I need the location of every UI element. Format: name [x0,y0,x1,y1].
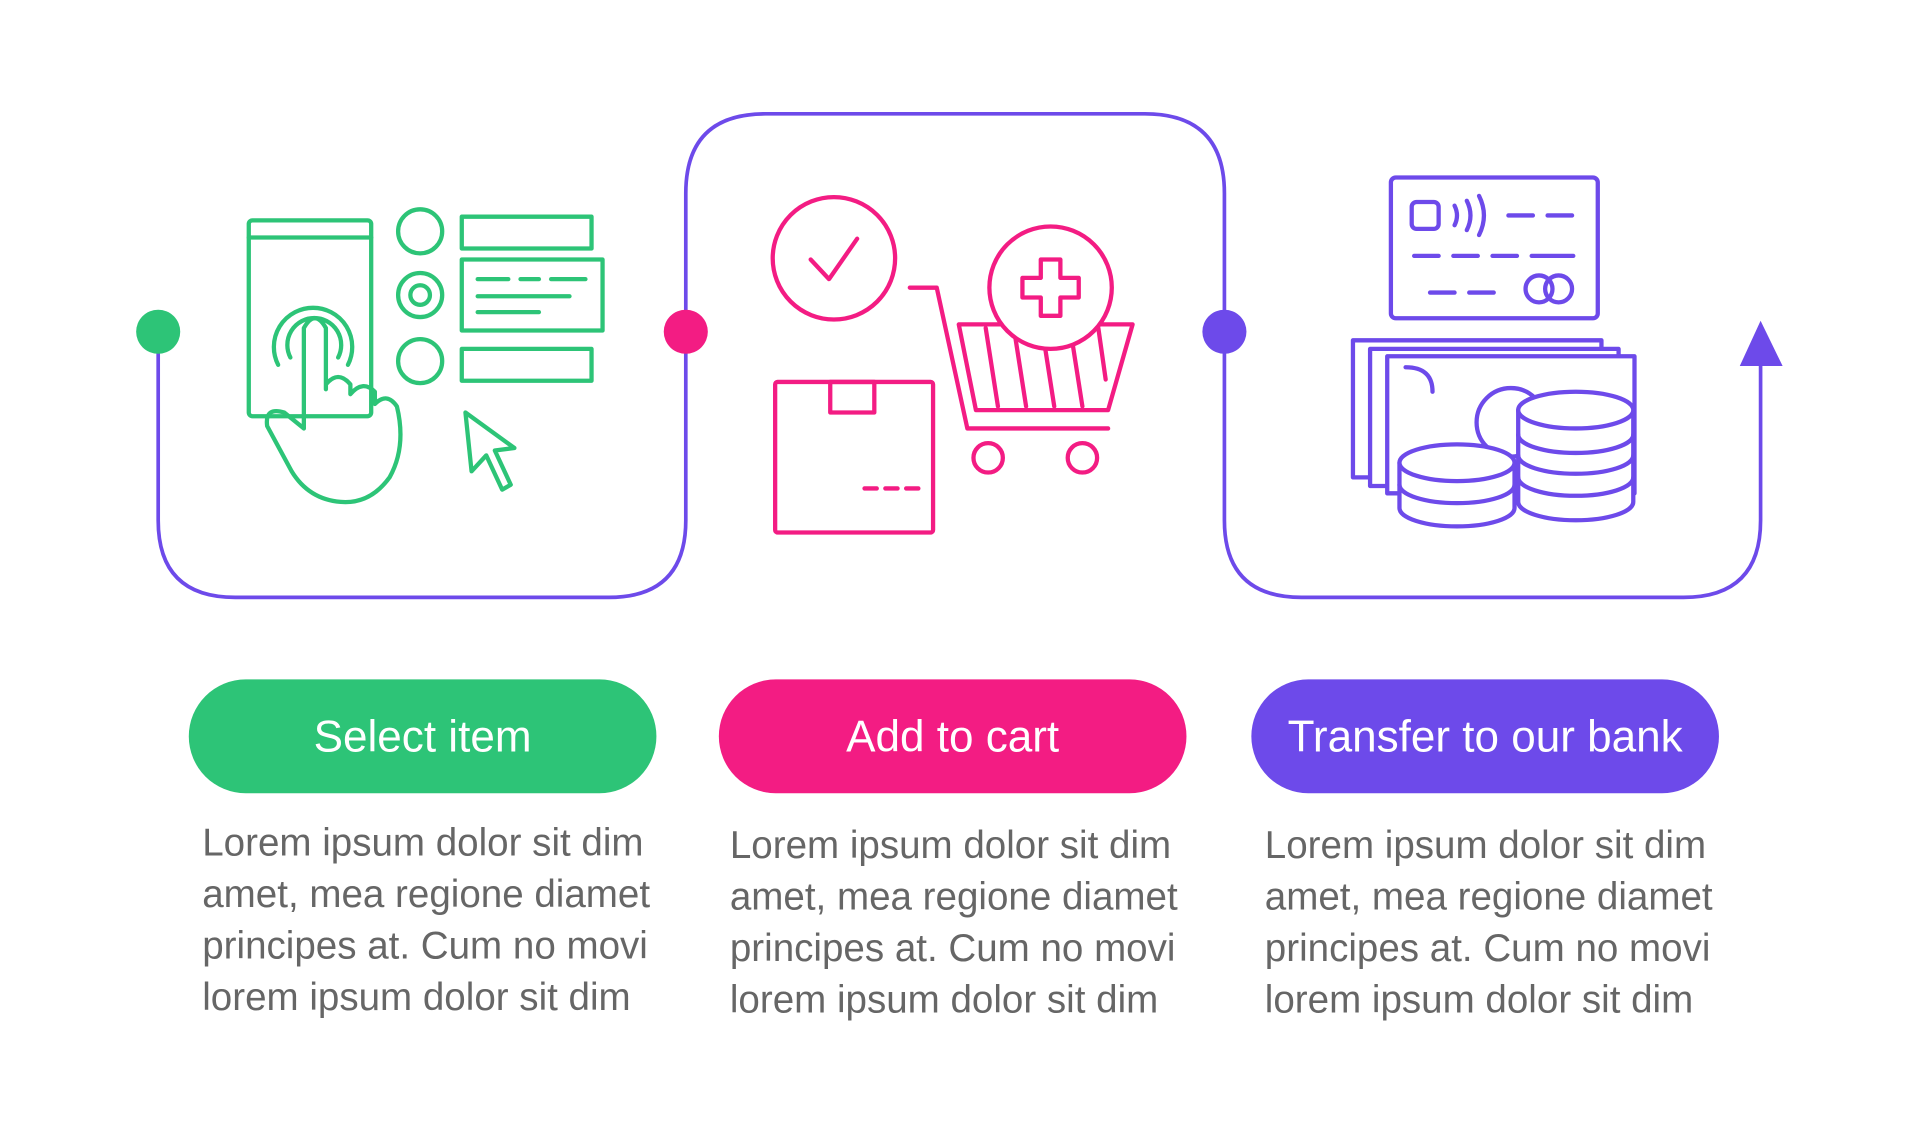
pill: Transfer to our bank: Transfer to our bank [1288,713,1684,762]
text block 1: principes at. Cum no movi [202,925,648,968]
text block 2: amet, mea regione diamet [730,876,1178,919]
flow line [158,114,1761,597]
text block 2 [730,824,1178,1021]
pill: Select item: Select item [314,713,532,762]
text block 1: Lorem ipsum dolor sit dim [202,822,644,865]
icon: bank transfer [1353,178,1634,526]
icon: select item [249,209,603,502]
text block 3 [1265,824,1713,1021]
dot: step 1 [136,310,180,354]
text block 3: principes at. Cum no movi [1265,927,1710,970]
icon: add to cart [773,197,1133,532]
pill: Transfer to our bank [1251,679,1719,793]
text block 2: lorem ipsum dolor sit dim [730,978,1158,1021]
pill: Add to cart: Add to cart [846,713,1059,762]
pill: Select item [189,679,656,793]
pill: Add to cart [719,679,1186,793]
text block 3: amet, mea regione diamet [1265,876,1713,919]
text block 3: lorem ipsum dolor sit dim [1265,978,1693,1021]
text block 1: amet, mea regione diamet [202,873,650,916]
text block 1 [202,822,650,1019]
dot: step 2 [664,310,708,354]
arrow head [1740,321,1783,366]
text block 2: principes at. Cum no movi [730,927,1175,970]
text block 3: Lorem ipsum dolor sit dim [1265,824,1706,867]
dot: step 3 [1202,310,1246,354]
text block 2: Lorem ipsum dolor sit dim [730,824,1171,867]
text block 1: lorem ipsum dolor sit dim [202,976,631,1019]
